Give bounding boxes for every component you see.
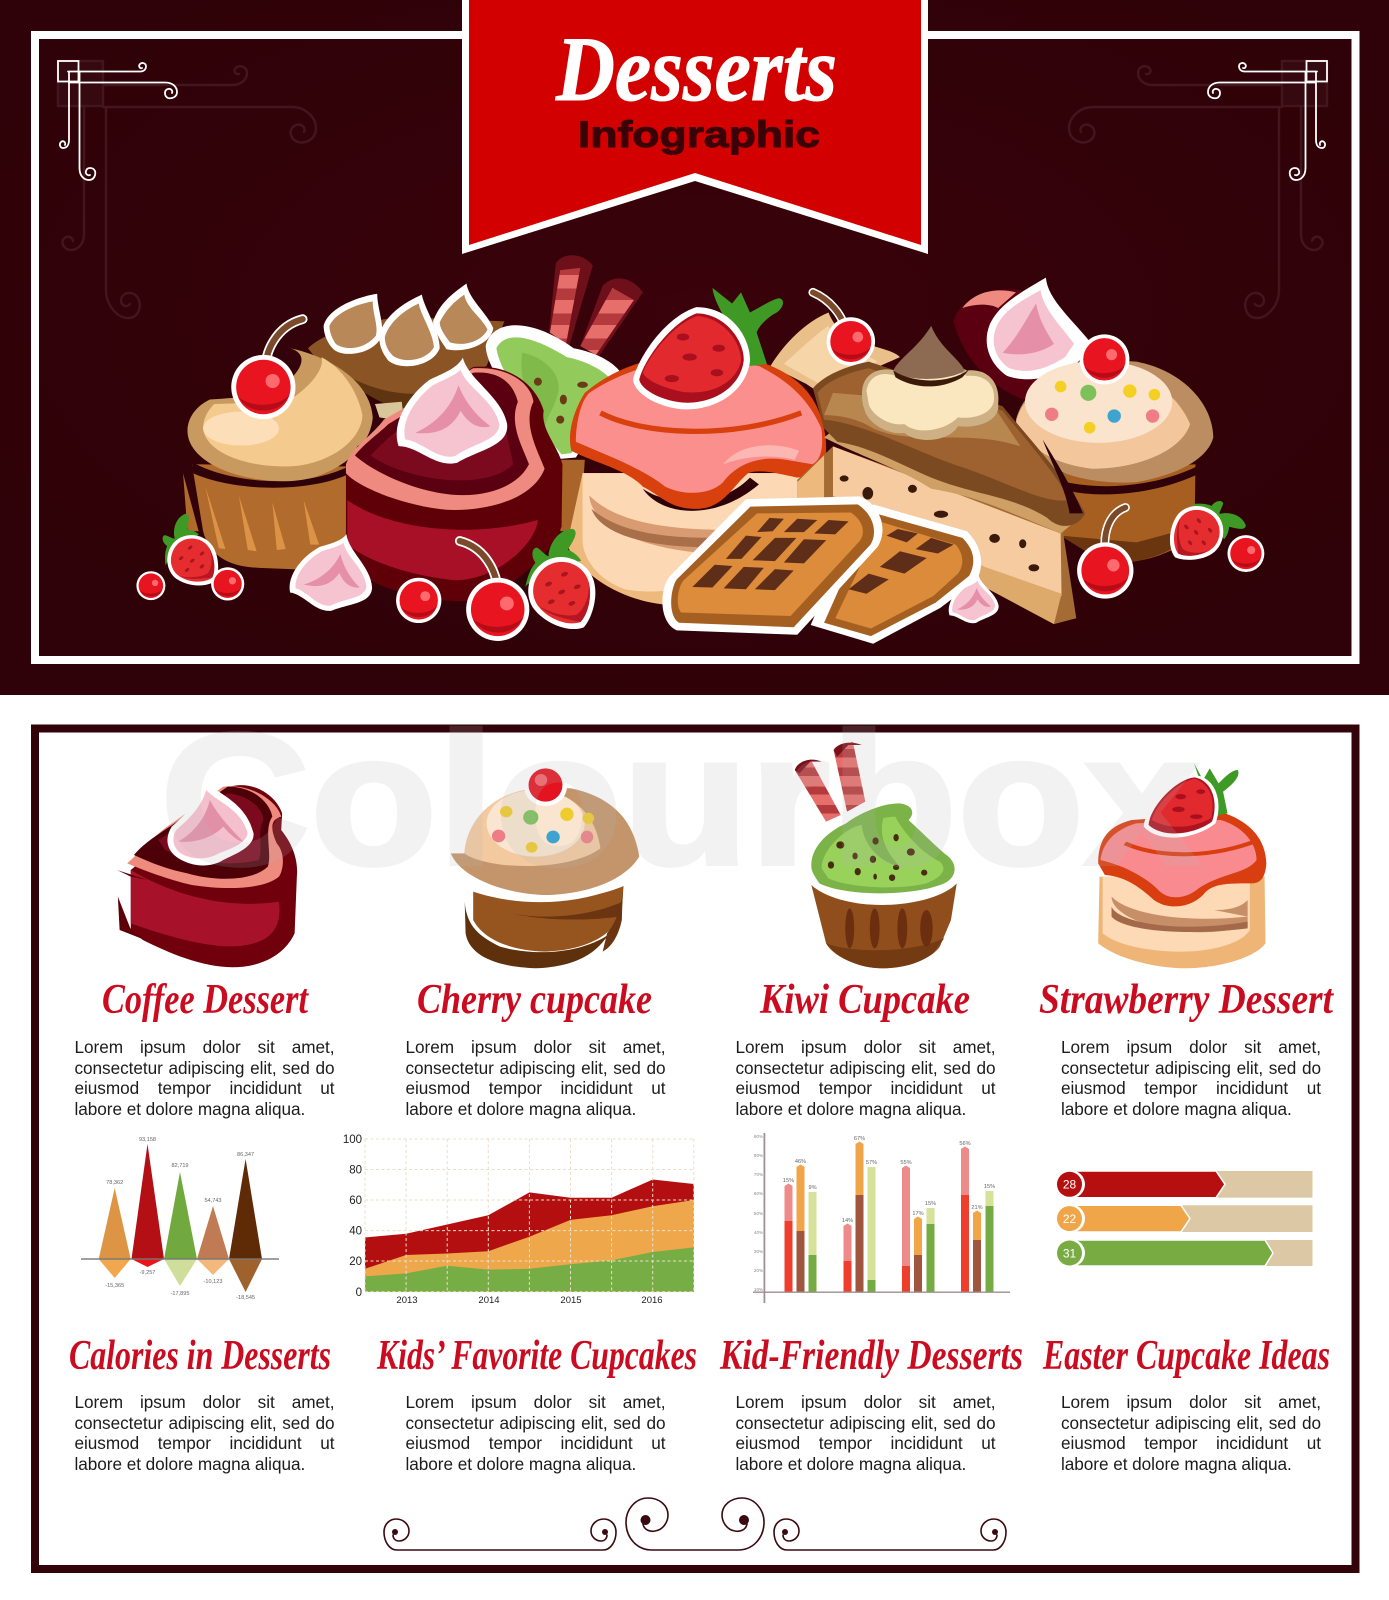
chart: grouped bars: 60%: [754, 1191, 763, 1196]
chart: stacked area: 2013: [396, 1295, 418, 1306]
icon: kiwi cupcake: [795, 742, 957, 968]
chart: grouped bars: 50%: [754, 1211, 763, 1216]
text: easter: labore et dolore magna aliqua.: [1061, 1454, 1292, 1474]
icon: strawberry dessert: [1098, 763, 1266, 968]
decorative flourish: [384, 1498, 1006, 1550]
text: kiwi cupcake: eiusmod tempor incididunt ut: [736, 1078, 996, 1098]
text: kid friendly: Lorem ipsum dolor sit amet,: [736, 1392, 996, 1412]
text: kids favorite: Lorem ipsum dolor sit amet,: [406, 1392, 666, 1412]
panel: dark hero background: [0, 0, 1389, 695]
text: kiwi cupcake: Lorem ipsum dolor sit amet,: [736, 1037, 996, 1057]
chart: calories diverging kites: -9,257: [140, 1270, 155, 1276]
watermark: Colourbox: [160, 694, 1200, 904]
text: easter: [1061, 1392, 1321, 1474]
icon: cherry cupcake: [451, 767, 639, 968]
chart: stacked area: 0: [356, 1287, 362, 1299]
right strawberry: [1155, 485, 1247, 574]
chart: grouped bars: 15%: [783, 1178, 794, 1184]
chart: stacked area: 2016: [641, 1295, 663, 1306]
text: calories: Lorem ipsum dolor sit amet,: [74, 1392, 334, 1412]
heading: kiwi cupcake: Kiwi Cupcake: [759, 977, 970, 1023]
chart: calories diverging kites: 78,362: [106, 1180, 123, 1186]
chart: stacked area: 2015: [560, 1295, 582, 1306]
heading: calories: Calories in Desserts: [69, 1333, 331, 1379]
text: coffee dessert: consectetur adipiscing elit, sed do: [74, 1058, 334, 1078]
chart: calories diverging kites: 54,743: [204, 1198, 222, 1204]
heading: strawberry dessert: Strawberry Dessert: [1039, 977, 1334, 1023]
text: kids favorite: [406, 1392, 666, 1474]
icon: coffee dessert: [117, 779, 297, 967]
chart: calories diverging kites: 93,158: [139, 1137, 156, 1143]
meringue front: [287, 527, 379, 617]
heading: coffee dessert: Coffee Dessert: [102, 977, 309, 1023]
right muffin: [1016, 334, 1213, 563]
text: strawberry dessert: Lorem ipsum dolor sit amet,: [1061, 1037, 1321, 1057]
banner ribbon: [462, 0, 928, 254]
back heart cake with cream: [954, 278, 1092, 402]
badge 28: 28: [1063, 1178, 1076, 1192]
text: kid friendly: eiusmod tempor incididunt ut: [736, 1433, 996, 1453]
panel: dessert cards frame: [35, 728, 1356, 1569]
chart: grouped bars: 14%: [842, 1218, 853, 1224]
chart: grouped bars: 67%: [854, 1136, 865, 1142]
text: kiwi cupcake: [736, 1037, 996, 1119]
front cherry with stem: [460, 541, 529, 641]
chart: calories diverging kites: 82,719: [171, 1163, 189, 1169]
text: cherry cupcake: Lorem ipsum dolor sit amet,: [406, 1037, 666, 1057]
chart: stacked area: 80: [349, 1164, 362, 1176]
chart: stacked area: 100: [343, 1134, 362, 1146]
chart: grouped bars: 46%: [795, 1159, 806, 1165]
front small cherry: [396, 578, 441, 623]
text: strawberry dessert: [1061, 1037, 1321, 1119]
chart: calories diverging kites: -17,895: [171, 1291, 189, 1297]
chart: calories diverging kites: -15,365: [105, 1283, 124, 1289]
chart: grouped bars: 10%: [754, 1287, 763, 1292]
text: easter: eiusmod tempor incididunt ut: [1061, 1433, 1321, 1453]
chart: grouped bars: 70%: [754, 1172, 763, 1177]
left small cherry two: [211, 567, 244, 600]
text: coffee dessert: [74, 1037, 334, 1119]
text: cherry cupcake: eiusmod tempor incididunt ut: [406, 1078, 666, 1098]
title: Desserts: [555, 18, 837, 120]
chart: grouped bars: 55%: [900, 1160, 912, 1166]
chart: progress arrows: [1057, 1170, 1312, 1267]
badge 31: 31: [1063, 1246, 1076, 1260]
badge 31: [1057, 1239, 1085, 1267]
text: cherry cupcake: [406, 1037, 666, 1119]
right cherry: [1077, 508, 1133, 599]
text: easter: consectetur adipiscing elit, sed do: [1061, 1413, 1321, 1433]
text: coffee dessert: Lorem ipsum dolor sit amet,: [74, 1037, 334, 1057]
strawberry cake: [567, 288, 826, 605]
text: calories: eiusmod tempor incididunt ut: [74, 1433, 334, 1453]
badge 28: [1057, 1170, 1085, 1198]
chart: grouped bars: 17%: [912, 1211, 924, 1217]
corner ornament: top left: [58, 61, 316, 318]
front strawberry: [510, 527, 610, 642]
heading: kids favorite: Kids’ Favorite Cupcakes: [376, 1333, 697, 1379]
text: kid friendly: labore et dolore magna aliqua.: [736, 1454, 966, 1474]
text: strawberry dessert: consectetur adipiscing elit, sed do: [1061, 1058, 1321, 1078]
waffles: [662, 496, 981, 644]
nut cake: [308, 283, 504, 422]
chart: calories diverging kites: [81, 1137, 279, 1301]
kiwi cupcake: [486, 325, 625, 531]
chart: stacked area: 2014: [478, 1295, 500, 1306]
text: coffee dessert: eiusmod tempor incididunt ut: [74, 1078, 334, 1098]
chart: grouped bars: 15%: [925, 1201, 936, 1207]
heart cake: [346, 367, 562, 601]
hero dessert illustration: [136, 255, 1264, 644]
left small cherry one: [136, 571, 165, 600]
chart: grouped bars: 56%: [959, 1141, 971, 1147]
chart: grouped bars: 9%: [808, 1185, 817, 1191]
text: cherry cupcake: consectetur adipiscing elit, sed do: [406, 1058, 666, 1078]
back cupcake with cherry: [770, 292, 900, 393]
small meringue right: [949, 575, 999, 623]
heading: cherry cupcake: Cherry cupcake: [417, 977, 652, 1023]
hero white frame: [35, 35, 1356, 660]
chocolate cake slice: [797, 326, 1085, 624]
text: strawberry dessert: labore et dolore magna aliqua.: [1061, 1099, 1292, 1119]
chart: grouped bars: 30%: [754, 1249, 763, 1254]
text: kiwi cupcake: labore et dolore magna aliqua.: [736, 1099, 966, 1119]
text: kids favorite: labore et dolore magna aliqua.: [406, 1454, 636, 1474]
badge 22: 22: [1063, 1212, 1076, 1226]
text: calories: consectetur adipiscing elit, sed do: [74, 1413, 334, 1433]
chart: grouped bars: 20%: [754, 1268, 763, 1273]
cream on heart cake: [397, 358, 507, 464]
chart: stacked area: 20: [349, 1256, 362, 1268]
text: cherry cupcake: labore et dolore magna aliqua.: [406, 1099, 636, 1119]
chart: grouped bars: 21%: [971, 1205, 983, 1211]
chart: grouped bars: 80%: [754, 1153, 763, 1158]
wafer sticks: [549, 255, 643, 357]
chart: stacked area: 60: [349, 1195, 362, 1207]
chart: grouped bars: [753, 1133, 1010, 1303]
text: kids favorite: eiusmod tempor incididunt ut: [406, 1433, 666, 1453]
chart: calories diverging kites: -10,123: [204, 1279, 222, 1285]
heading: kid friendly: Kid-Friendly Desserts: [719, 1333, 1023, 1379]
chart: grouped bars: 57%: [866, 1160, 877, 1166]
corner ornament: top right: [1069, 61, 1327, 318]
text: easter: Lorem ipsum dolor sit amet,: [1061, 1392, 1321, 1412]
chart: calories diverging kites: -18,545: [236, 1295, 255, 1301]
chart: grouped bars: 15%: [984, 1184, 995, 1190]
text: calories: labore et dolore magna aliqua.: [74, 1454, 305, 1474]
text: kid friendly: [736, 1392, 996, 1474]
text: kids favorite: consectetur adipiscing elit, sed do: [406, 1413, 666, 1433]
text: kiwi cupcake: consectetur adipiscing elit, sed do: [736, 1058, 996, 1078]
chart: stacked area: [343, 1134, 694, 1306]
subtitle: Infographic: [578, 114, 820, 155]
chart: grouped bars: 90%: [754, 1134, 763, 1139]
left cupcake: [183, 319, 373, 570]
badge 22: [1057, 1205, 1085, 1233]
chart: calories diverging kites: 86,347: [237, 1152, 254, 1158]
text: strawberry dessert: eiusmod tempor incididunt ut: [1061, 1078, 1321, 1098]
chart: stacked area: 40: [349, 1226, 362, 1238]
left strawberry: [147, 512, 232, 600]
chart: grouped bars: 40%: [754, 1230, 763, 1235]
text: calories: [74, 1392, 334, 1474]
text: coffee dessert: labore et dolore magna aliqua.: [74, 1099, 305, 1119]
text: kid friendly: consectetur adipiscing elit, sed do: [736, 1413, 996, 1433]
right small cherry: [1227, 535, 1264, 572]
